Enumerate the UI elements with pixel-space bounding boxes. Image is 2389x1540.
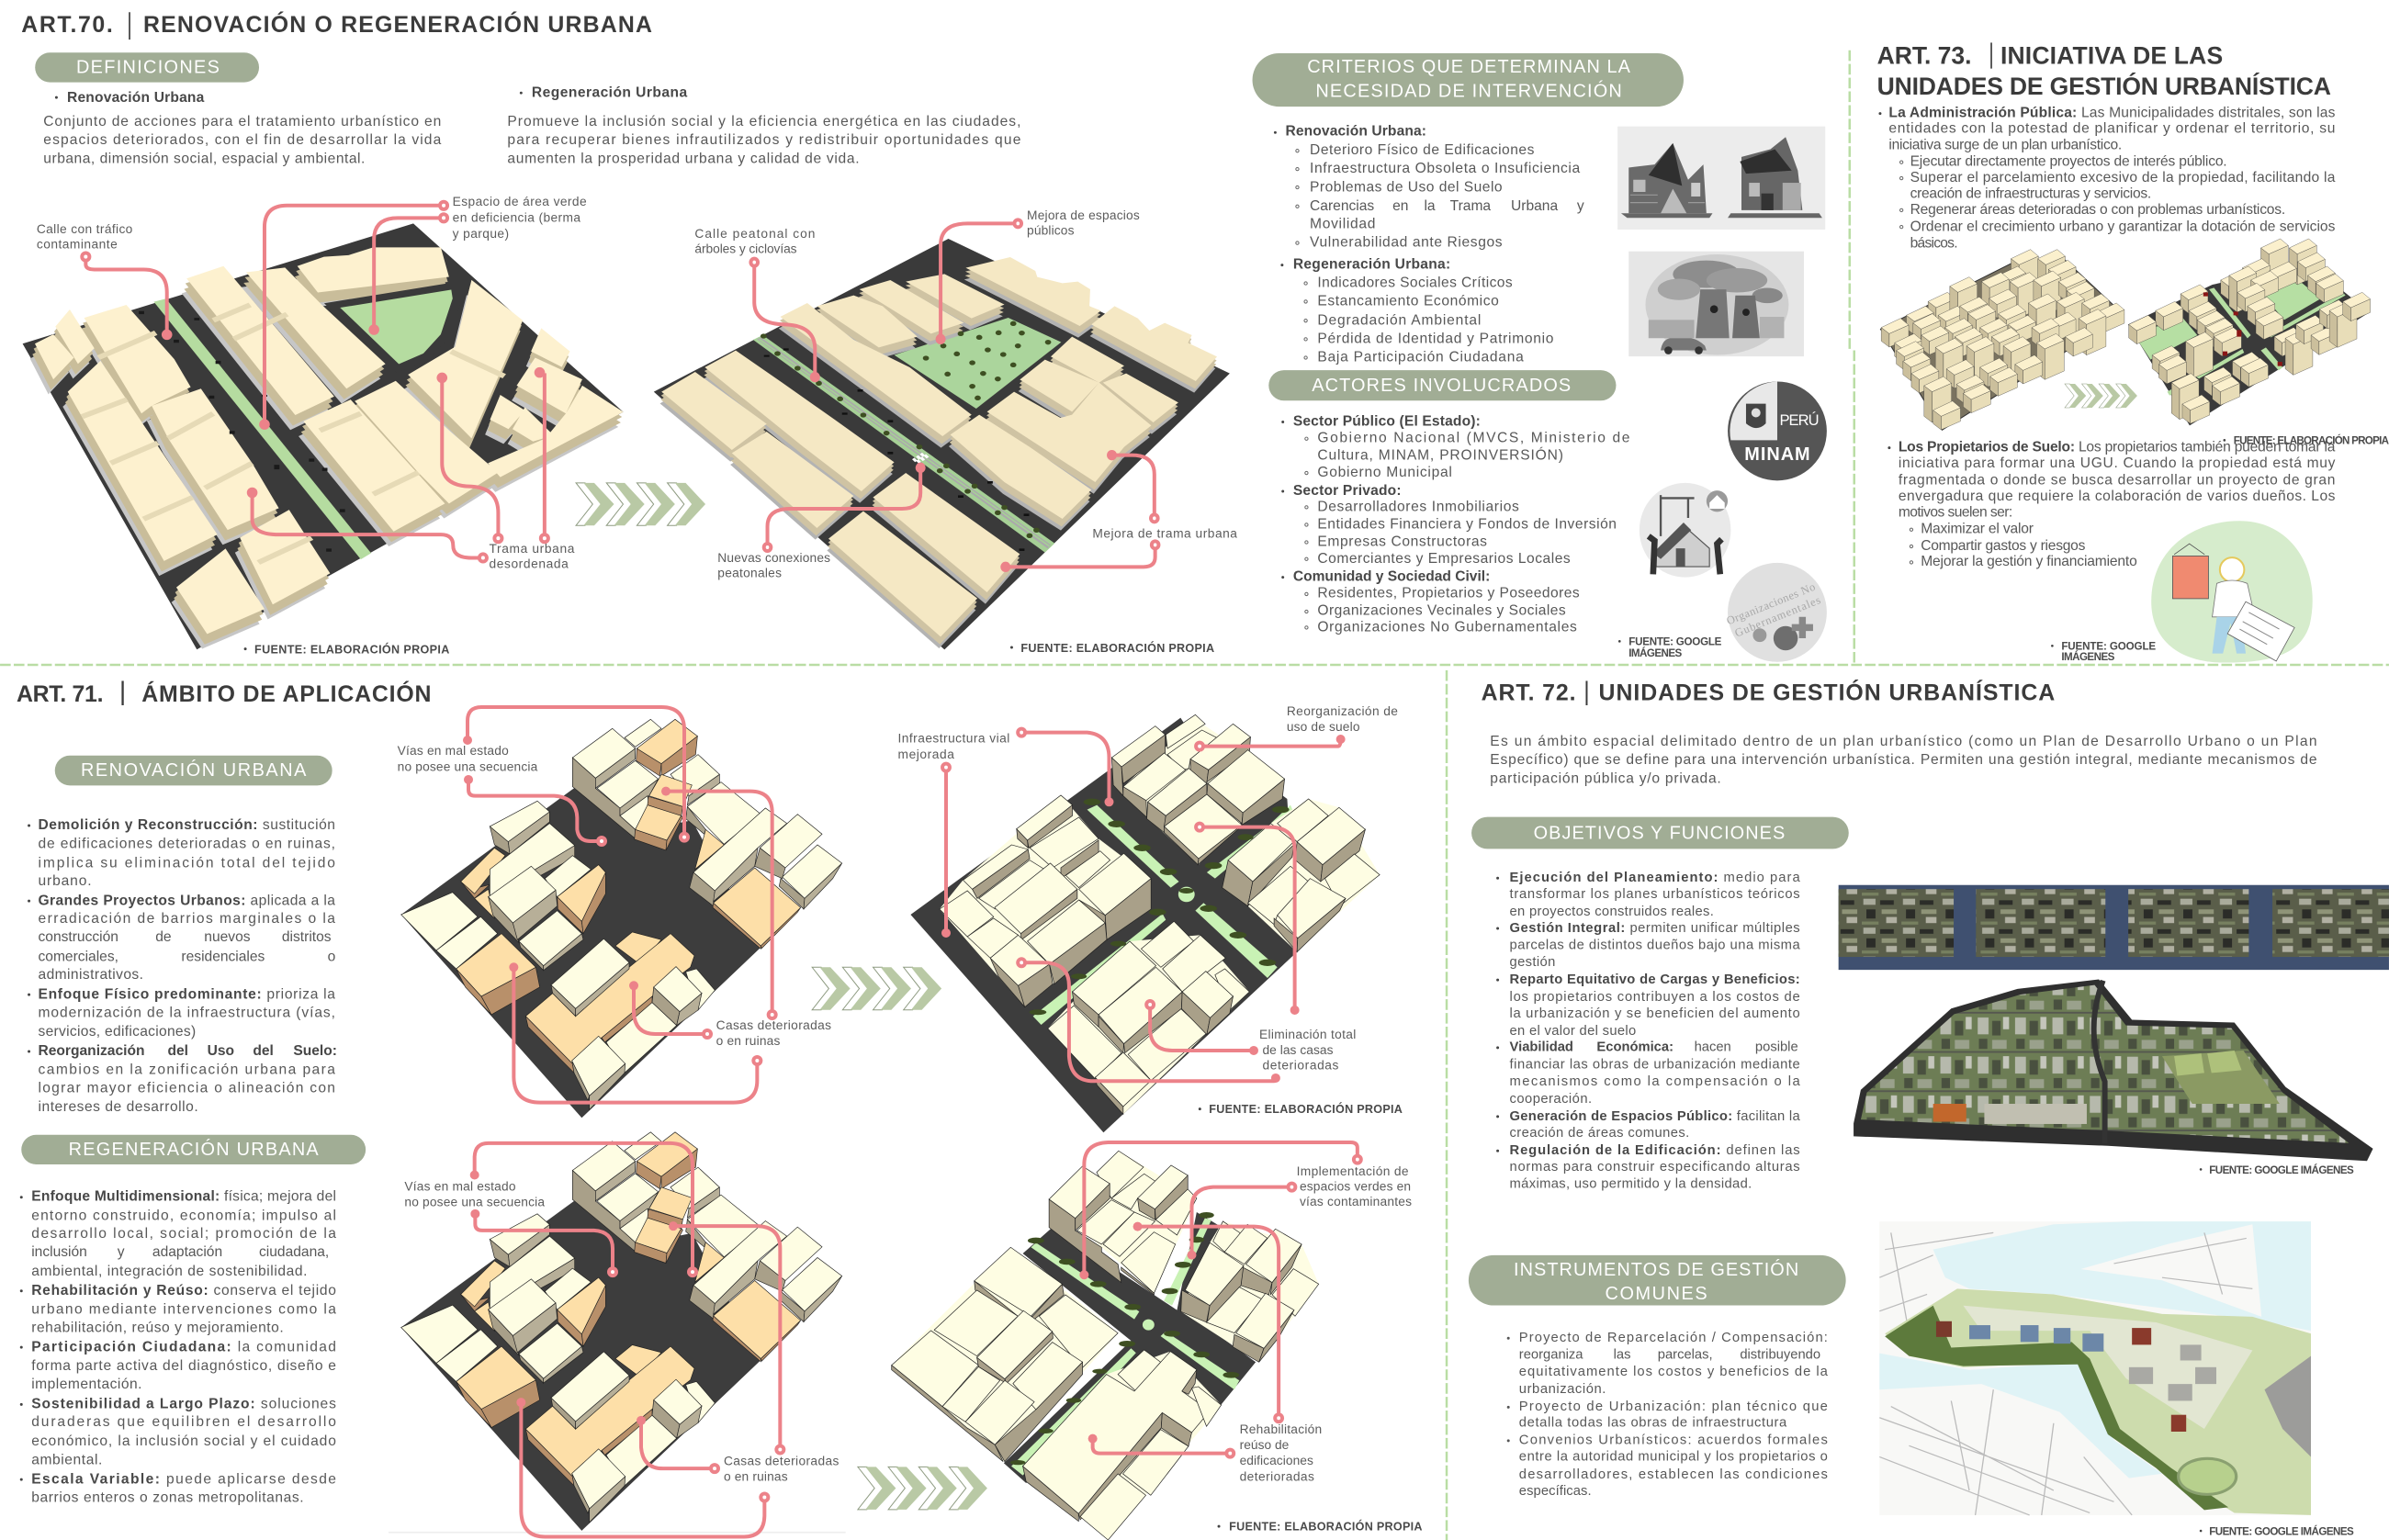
heading: art 73: INICIATIVA DE LAS [2000, 42, 2223, 70]
labels: diagram 1: desordenada [489, 557, 569, 571]
labels: diagram 1: en deficiencia (berma [453, 210, 580, 224]
labels: diagram 2: árboles y ciclovías [694, 242, 797, 255]
list: actores: Sector Privado: [1293, 483, 1402, 499]
image: aerial views strip [1839, 885, 2389, 970]
labels: diagram 1: Espacio de área verde [453, 195, 587, 208]
text: intro [1490, 734, 2317, 786]
labels: diagram 6: Implementación de [1297, 1164, 1409, 1178]
list: renovación urbana: administrativos. [39, 967, 143, 983]
list: criterios: Estancamiento Económico [1317, 294, 1499, 309]
list: regeneración urbana: Sostenibilidad a Largo Plazo: soluciones [31, 1397, 336, 1412]
labels: diagram 6: deterioradas [1240, 1469, 1314, 1483]
list: instrumentos: específicas. [1519, 1484, 1592, 1499]
list: criterios: Indicadores Sociales Críticos [1317, 275, 1513, 291]
list: objetivos: hacen [1695, 1040, 1731, 1055]
list: actores: Desarrolladores Inmobiliarios [1317, 500, 1519, 515]
text block: renovación urbana definition: urbana, dimensión social, espacial y ambiental. [43, 151, 365, 166]
image: pollution [1628, 252, 1804, 356]
heading: art 73: ART. 73. [1877, 42, 1971, 70]
diagram: renovation before [401, 707, 842, 1118]
text: administración pública: Ejecutar directamente proyectos de interés público. [1910, 153, 2227, 169]
list: criterios: Degradación Ambiental [1317, 312, 1481, 328]
heading: art 71 [17, 680, 431, 707]
text block: regeneración urbana definition [507, 84, 1020, 166]
text: intro: Es un ámbito espacial delimitado dentro de un plan urbanístico (como un Plan de Desarrollo Urbano o un Plan [1490, 734, 2317, 749]
diagram: renovation after [910, 714, 1380, 1132]
list: criterios: y [1577, 198, 1584, 214]
callouts: vías en mal estado [463, 707, 688, 845]
labels: diagram 6: espacios verdes en [1300, 1180, 1411, 1194]
list: actores: Entidades Financiera y Fondos de Inversión [1317, 517, 1617, 533]
list: regeneración urbana: barrios enteros o zonas metropolitanas. [31, 1490, 304, 1506]
text: administración pública: creación de infraestructuras y servicios. [1910, 185, 2151, 201]
heading: art 70: ART.70. [21, 12, 113, 38]
list: actores: Organizaciones No Gubernamentales [1317, 620, 1577, 635]
text: propietarios de suelo: envergadura que requiere la colaboración de varios dueños. Los [1899, 489, 2336, 504]
pill: renovación urbana: RENOVACIÓN URBANA [81, 759, 307, 781]
labels: diagram 2 [694, 208, 1237, 580]
list: instrumentos: las [1614, 1348, 1631, 1363]
labels: diagram 5: o en ruinas [724, 1469, 788, 1483]
logo: NGOs: Organizaciones No [1725, 580, 1817, 627]
list: actores: Comunidad y Sociedad Civil: [1293, 568, 1490, 584]
callout: espacio área verde [259, 202, 447, 430]
arrow: chevrons diagram 1 [576, 483, 705, 525]
list: actores: Gobierno Nacional (MVCS, Ministerio de [1317, 431, 1629, 446]
logo: Perú MINAM [1728, 382, 1827, 480]
list: criterios: Pérdida de Identidad y Patrimonio [1317, 332, 1554, 347]
list: objetivos: máximas, uso permitido y la densidad. [1510, 1177, 1752, 1192]
list: objetivos: Ejecución del Planeamiento: medio para [1510, 871, 1800, 885]
list: regeneración urbana: Enfoque Multidimensional: física; mejora del [31, 1189, 336, 1205]
heading: art 70: RENOVACIÓN O REGENERACIÓN URBANA [143, 10, 652, 38]
arrow: chevrons diagram 5 [858, 1467, 987, 1510]
list: regeneración urbana: económico, la inclusión social y el cuidado [31, 1433, 336, 1449]
callout: nuevas conexiones [764, 463, 926, 551]
labels: diagram 2: Nuevas conexiones [717, 551, 830, 565]
list: regeneración urbana: adaptación [152, 1244, 222, 1260]
text block: regeneración urbana definition: Regeneración Urbana [532, 84, 687, 100]
diagram: regeneration before [401, 1132, 842, 1536]
list: renovación urbana: Grandes Proyectos Urbanos: aplicada a la [39, 893, 335, 908]
callout: reorganización [1196, 735, 1346, 750]
list: instrumentos: parcelas, [1658, 1348, 1713, 1363]
list: instrumentos: detalla todas las obras de infraestructura [1519, 1416, 1787, 1431]
pill: actores: ACTORES INVOLUCRADOS [1312, 376, 1571, 396]
labels: diagram 5: Casas deterioradas [724, 1455, 839, 1468]
text: propietarios de suelo: fragmentada o donde se busca desarrollar un proyecto de gran [1899, 472, 2335, 488]
list: instrumentos: Proyecto de Reparcelación / Compensación: [1519, 1331, 1828, 1345]
list: criterios: en [1392, 198, 1408, 214]
list: criterios [1274, 124, 1584, 365]
source: google 1: IMÁGENES [1628, 647, 1683, 659]
text: administración pública: Regenerar áreas deterioradas o con problemas urbanísticos. [1910, 202, 2285, 218]
callout: mejora de espacios públicos [936, 219, 1021, 344]
list: regeneración urbana [20, 1189, 336, 1506]
list: objetivos: Regulación de la Edificación: definen las [1510, 1143, 1800, 1158]
list: renovación urbana: de edificaciones deterioradas o en ruinas, [39, 836, 335, 851]
heading: art 73 [1877, 42, 2331, 100]
list: renovación urbana [28, 817, 337, 1115]
list: regeneración urbana: ambiental. [31, 1453, 102, 1468]
list: instrumentos: reorganiza [1519, 1348, 1583, 1363]
diagram: regeneration after [892, 1142, 1361, 1540]
labels: diagram 6 [1240, 1164, 1412, 1483]
list: renovación urbana: nuevos [204, 929, 251, 945]
list: criterios: Carencias [1310, 198, 1374, 214]
text: administración pública: básicos. [1910, 235, 1958, 251]
list: renovación urbana: Demolición y Reconstrucción: sustitución [39, 817, 335, 833]
labels: diagram 5 [404, 1179, 839, 1483]
list: objetivos: financiar las obras de urbanización mediante [1510, 1058, 1800, 1073]
list: actores: Organizaciones Vecinales y Sociales [1317, 603, 1566, 619]
labels: diagram 2: Mejora de espacios [1027, 208, 1140, 222]
list: renovación urbana: construcción [39, 929, 118, 945]
labels: diagram 2: Mejora de trama urbana [1092, 527, 1237, 541]
source: google 1: FUENTE: GOOGLE [1628, 635, 1722, 647]
list: criterios: Renovación Urbana: [1286, 124, 1426, 140]
source: google 1 [1618, 635, 1722, 659]
list: renovación urbana: Suelo: [293, 1043, 337, 1059]
text: intro: participación pública y/o privada. [1490, 770, 1721, 786]
text block: regeneración urbana definition: para recuperar bienes infrautilizados y redistribuir oportunidades que [507, 132, 1020, 148]
labels: diagram 6: reúso de [1240, 1438, 1290, 1452]
list: objetivos: Viabilidad [1510, 1040, 1573, 1055]
list: actores: Residentes, Propietarios y Poseedores [1317, 586, 1580, 601]
list: renovación urbana: implica su eliminación total del tejido [39, 855, 335, 871]
list: actores: Empresas Constructoras [1317, 534, 1487, 550]
heading: art 71: ÁMBITO DE APLICACIÓN [141, 680, 431, 707]
list: objetivos: Económica: [1596, 1040, 1673, 1055]
list: renovación urbana: Reorganización [39, 1043, 145, 1059]
labels: diagram 1: contaminante [37, 237, 118, 251]
pill: criterios: NECESIDAD DE INTERVENCIÓN [1315, 80, 1622, 101]
list: renovación urbana: del [167, 1043, 188, 1059]
pill: objetivos [1471, 817, 1849, 849]
list: actores: Gobierno Municipal [1317, 465, 1452, 480]
labels: diagram 3: no posee una secuencia [398, 759, 538, 773]
labels: diagram 2: públicos [1027, 223, 1075, 237]
pill: regeneración urbana [21, 1135, 366, 1164]
pill: regeneración urbana: REGENERACIÓN URBANA [69, 1139, 319, 1160]
text: propietarios de suelo: iniciativa para formar una UGU. Cuando la propiedad está muy [1899, 455, 2336, 471]
list: instrumentos: entre la autoridad municipal y los propietarios o [1519, 1450, 1828, 1465]
labels: diagram 6: Rehabilitación [1240, 1422, 1322, 1436]
labels: diagram 3: Casas deterioradas [716, 1018, 831, 1032]
list: renovación urbana: lograr mayor eficiencia o alineación con [39, 1080, 335, 1096]
logo: NGOs [1725, 563, 1827, 662]
source: diagram 4: FUENTE: ELABORACIÓN PROPIA [1209, 1102, 1403, 1116]
list: regeneración urbana: Participación Ciudadana: la comunidad [31, 1339, 336, 1355]
list: objetivos: transformar los planes urbanísticos teóricos [1510, 887, 1800, 902]
list: regeneración urbana: Escala Variable: puede aplicarse desde [31, 1471, 336, 1487]
list: regeneración urbana: urbano mediante intervenciones como la [31, 1301, 336, 1317]
text: administración pública [1878, 105, 2336, 251]
labels: diagram 5: no posee una secuencia [404, 1196, 545, 1209]
panel: article 71 [17, 680, 1422, 1540]
list: instrumentos: Convenios Urbanísticos: acuerdos formales [1519, 1433, 1828, 1447]
list: regeneración urbana: duraderas que equilibren el desarrollo [31, 1414, 336, 1430]
pill: criterios [1253, 53, 1684, 107]
list: regeneración urbana: desarrollo local, social; promoción de la [31, 1226, 336, 1242]
source: diagram 2: FUENTE: ELABORACIÓN PROPIA [1020, 641, 1214, 655]
list: objetivos [1496, 871, 1800, 1192]
list: objetivos: los propietarios contribuyen a los costos de [1510, 990, 1800, 1005]
text: administración pública: Ordenar el crecimiento urbano y garantizar la dotación de servicios [1910, 219, 2336, 235]
list: criterios: Infraestructura Obsoleta o Insuficiencia [1310, 161, 1580, 176]
list: regeneración urbana: forma parte activa del diagnóstico, diseño e [31, 1358, 336, 1374]
list: criterios: Problemas de Uso del Suelo [1310, 179, 1503, 195]
list: instrumentos [1507, 1331, 1829, 1499]
labels: diagram 1: Calle con tráfico [37, 222, 133, 236]
source: google 2: FUENTE: GOOGLE [2061, 640, 2156, 652]
text: intro: Específico) que se define para una intervención urbanística. Permiten una gestión integral, mediante mecanismos de [1490, 752, 2317, 768]
labels: diagram 6: vías contaminantes [1300, 1195, 1412, 1208]
list: renovación urbana: cambios en la zonificación urbana para [39, 1062, 335, 1077]
list: regeneración urbana: Rehabilitación y Reúso: conserva el tejido [31, 1283, 336, 1298]
list: objetivos: mecanismos como la compensación o la [1510, 1074, 1800, 1089]
illustration: owner with document [2151, 521, 2313, 663]
labels: diagram 6: edificaciones [1240, 1454, 1313, 1467]
labels: diagram 4: Infraestructura vial [898, 731, 1009, 745]
list: objetivos: Generación de Espacios Público: facilitan la [1510, 1109, 1800, 1124]
text: propietarios de suelo: Compartir gastos y riesgos [1921, 538, 2086, 554]
list: instrumentos: equitativamente los costos y beneficios de la [1519, 1365, 1829, 1379]
pill: instrumentos [1469, 1255, 1846, 1306]
list: renovación urbana: de [155, 929, 172, 945]
pill: objetivos: OBJETIVOS Y FUNCIONES [1534, 824, 1785, 844]
list: regeneración urbana: entorno construido, economía; impulso al [31, 1208, 336, 1223]
text block: renovación urbana definition [43, 90, 442, 166]
list: criterios: Vulnerabilidad ante Riesgos [1310, 235, 1503, 251]
callouts: eliminación [1018, 824, 1300, 1083]
source: google 2 [2051, 640, 2156, 663]
text: propietarios de suelo [1888, 439, 2336, 569]
text: administración pública: entidades con la potestad de planificar y ordenar el territorio, su [1888, 120, 2335, 136]
image: 3D masterplan [1854, 980, 2373, 1161]
diagram: regenerated urban fabric [654, 219, 1230, 649]
labels: diagram 4: Reorganización de [1287, 704, 1398, 718]
text block: renovación urbana definition: Conjunto de acciones para el tratamiento urbanístico en [43, 114, 441, 129]
icon: construction and people [1640, 483, 1730, 578]
panel: article 73 [1877, 42, 2389, 663]
callouts: casas deterioradas [509, 787, 776, 1103]
text: propietarios de suelo: Maximizar el valor [1921, 522, 2034, 537]
source: small diagrams: FUENTE: ELABORACIÓN PROPIA [2234, 435, 2389, 447]
arrow: chevrons small [2065, 384, 2137, 408]
callout: implementación verde [1079, 1142, 1361, 1279]
list: renovación urbana: intereses de desarrollo. [39, 1099, 198, 1115]
list: objetivos: Reparto Equitativo de Cargas y Beneficios: [1510, 972, 1800, 987]
list: regeneración urbana: inclusión [31, 1244, 87, 1260]
labels: diagram 3: Vías en mal estado [398, 744, 509, 758]
pill: instrumentos: INSTRUMENTOS DE GESTIÓN [1514, 1259, 1798, 1280]
callouts: casas deterioradas [516, 1221, 783, 1536]
list: renovación urbana: del [253, 1043, 274, 1059]
list: instrumentos: distribuyendo [1740, 1348, 1820, 1363]
text: administración pública: Superar el parcelamiento excesivo de la propiedad, facilitando la [1910, 170, 2336, 185]
list: objetivos: gestión [1510, 955, 1555, 970]
text block: renovación urbana definition: espacios deteriorados, con el fin de desarrollar la vida [43, 132, 442, 148]
text: propietarios de suelo: motivos suelen ser: [1899, 504, 2012, 520]
list: renovación urbana: Enfoque Físico predominante: prioriza la [39, 986, 335, 1002]
text: propietarios de suelo: Los Propietarios de Suelo: Los propietarios también pueden tomar la [1899, 439, 2336, 455]
list: criterios: Deterioro Físico de Edificaciones [1310, 142, 1535, 158]
heading: art 72: ART. 72. [1482, 680, 1576, 706]
list: objetivos: la urbanización y se beneficien del aumento [1510, 1006, 1800, 1021]
callout: calle peatonal [750, 259, 820, 382]
list: criterios: la [1424, 198, 1436, 214]
list: objetivos: en proyectos construidos reales. [1510, 905, 1714, 919]
labels: diagram 1 [37, 195, 587, 571]
heading: art 73: UNIDADES DE GESTIÓN URBANÍSTICA [1877, 73, 2331, 100]
list: criterios: Urbana [1511, 198, 1558, 214]
list: renovación urbana: modernización de la infraestructura (vías, [39, 1006, 335, 1021]
heading: art 72: UNIDADES DE GESTIÓN URBANÍSTICA [1599, 679, 2055, 706]
list: instrumentos: Proyecto de Urbanización: plan técnico que [1519, 1399, 1828, 1414]
diagram: reorganized blocks after [2128, 239, 2371, 425]
list: renovación urbana: distritos [282, 929, 332, 945]
labels: diagram 1: Trama urbana [489, 542, 575, 556]
text: propietarios de suelo: Mejorar la gestión y financiamiento [1921, 554, 2137, 569]
list: instrumentos: urbanización. [1519, 1382, 1606, 1397]
list: regeneración urbana: y [118, 1244, 125, 1260]
labels: diagram 3: o en ruinas [716, 1034, 780, 1048]
list: regeneración urbana: ambiental, integración de sostenibilidad. [31, 1264, 307, 1279]
list: criterios: Movilidad [1310, 216, 1375, 231]
list: renovación urbana: urbano. [39, 873, 92, 889]
heading: art 70 [21, 10, 652, 39]
list: regeneración urbana: implementación. [31, 1377, 141, 1392]
arrow: chevrons diagram 3 [812, 967, 941, 1010]
source: google 4: FUENTE: GOOGLE IMÁGENES [2209, 1526, 2354, 1538]
list: actores: Cultura, MINAM, PROINVERSIÓN) [1317, 445, 1563, 463]
list: objetivos: cooperación. [1510, 1092, 1592, 1107]
list: actores: Comerciantes y Empresarios Locales [1317, 551, 1571, 567]
pill: definiciones: DEFINICIONES [76, 58, 220, 78]
text block: regeneración urbana definition: Promueve la inclusión social y la eficiencia energética en las ciudades, [507, 114, 1020, 129]
labels: diagram 4: mejorada [898, 748, 954, 761]
pill: actores [1268, 370, 1616, 400]
pill: definiciones [35, 52, 259, 83]
list: renovación urbana: comerciales, [39, 950, 118, 965]
labels: diagram 4 [898, 704, 1398, 1072]
heading: art 71: ART. 71. [17, 681, 104, 707]
labels: diagram 2: Calle peatonal con [694, 227, 815, 241]
image: river site plan [1879, 1221, 2311, 1515]
list: objetivos: posible [1755, 1040, 1798, 1055]
source: google 2: IMÁGENES [2061, 651, 2115, 663]
pill: criterios: CRITERIOS QUE DETERMINAN LA [1307, 57, 1631, 77]
list: renovación urbana: residenciales [181, 950, 265, 965]
list: renovación urbana: servicios, edificaciones) [39, 1024, 196, 1040]
list: actores [1281, 413, 1629, 635]
list: criterios: Trama [1450, 198, 1491, 214]
text: administración pública: iniciativa surge de un plan urbanístico. [1888, 138, 2122, 153]
callouts: infraestructura vial [941, 729, 1113, 938]
panel: article 72 [1469, 679, 2389, 1538]
text: administración pública: La Administración Pública: Las Municipalidades distritales, son las [1888, 105, 2336, 120]
source: google 3: FUENTE: GOOGLE IMÁGENES [2209, 1164, 2354, 1176]
pill: renovación urbana [55, 756, 332, 785]
source: diagram 1: FUENTE: ELABORACIÓN PROPIA [254, 643, 449, 657]
list: actores: Sector Público (El Estado): [1293, 413, 1481, 429]
labels: diagram 1: y parque) [453, 227, 509, 241]
diagram: disordered urban fabric [23, 202, 624, 649]
image: deteriorated houses [1617, 127, 1825, 230]
text block: regeneración urbana definition: aumenten la prosperidad urbana y calidad de vida. [507, 151, 860, 166]
list: objetivos: normas para construir especificando alturas [1510, 1160, 1800, 1175]
labels: diagram 4: uso de suelo [1287, 720, 1360, 734]
callout: calle con tráfico [82, 253, 173, 340]
list: objetivos: en el valor del suelo [1510, 1024, 1636, 1039]
list: objetivos: creación de áreas comunes. [1510, 1126, 1689, 1141]
list: renovación urbana: o [328, 950, 336, 965]
list: renovación urbana: erradicación de barrios marginales o la [39, 911, 335, 927]
source: diagram 6: FUENTE: ELABORACIÓN PROPIA [1229, 1520, 1422, 1534]
panel: article 70 [21, 10, 1827, 662]
pill: instrumentos: COMUNES [1606, 1284, 1707, 1304]
logo: Perú MINAM: PERÚ [1779, 411, 1820, 429]
list: criterios: Regeneración Urbana: [1293, 257, 1450, 273]
list: objetivos: Gestión Integral: permiten unificar múltiples [1510, 921, 1800, 936]
list: regeneración urbana: rehabilitación, reúso y mejoramiento. [31, 1320, 284, 1335]
diagram: dense blocks before [1880, 250, 2124, 430]
logo: NGOs: Gubernamentales [1733, 593, 1822, 640]
list: objetivos: parcelas de distintos dueños bajo una misma [1510, 939, 1800, 953]
callout: trama urbana desordenada [247, 367, 548, 562]
labels: diagram 4: deterioradas [1262, 1058, 1339, 1072]
list: regeneración urbana: ciudadana, [259, 1244, 329, 1260]
list: instrumentos: desarrolladores, establecen las condiciones [1519, 1467, 1828, 1482]
callout: mejora de trama [1000, 450, 1158, 572]
callouts: rehabilitación [1088, 1222, 1282, 1457]
labels: diagram 2: peatonales [717, 567, 782, 580]
logo: Perú MINAM: MINAM [1744, 444, 1810, 465]
text block: renovación urbana definition: Renovación Urbana [67, 90, 205, 106]
labels: diagram 5: Vías en mal estado [404, 1179, 516, 1193]
list: renovación urbana: Uso [208, 1043, 234, 1059]
list: criterios: Baja Participación Ciudadana [1317, 350, 1524, 365]
callouts: vías en mal estado [470, 1143, 696, 1276]
labels: diagram 4: de las casas [1262, 1043, 1334, 1057]
labels: diagram 4: Eliminación total [1259, 1028, 1356, 1041]
labels: diagram 3 [398, 744, 831, 1048]
